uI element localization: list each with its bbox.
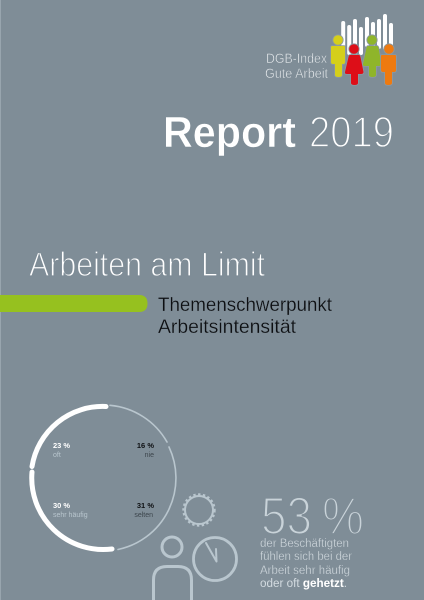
ring label: 31 % selten: selten bbox=[134, 512, 153, 519]
ring segment: sehr häufig 30 % bbox=[32, 472, 112, 550]
ring label: 30 % sehr häufig bbox=[53, 501, 88, 519]
logo text: Gute Arbeit bbox=[265, 66, 328, 81]
statistic description bbox=[260, 538, 352, 590]
logo yellow figure bbox=[331, 35, 345, 77]
logo red figure bbox=[345, 44, 364, 85]
logo text bbox=[265, 51, 328, 81]
ring label: 23 % oft: 23 % bbox=[53, 441, 70, 450]
logo text: DGB-Index bbox=[266, 51, 327, 66]
statistic: 53 % bbox=[261, 487, 364, 546]
ring segment: oft 23 % bbox=[32, 406, 106, 466]
ring segment: selten 31 % bbox=[118, 447, 176, 550]
icon: gear bbox=[184, 494, 214, 526]
ring label: 23 % oft: oft bbox=[53, 452, 61, 459]
statistic description: der Beschäftigten bbox=[260, 538, 349, 550]
statistic description: fühlen sich bei der bbox=[260, 551, 352, 563]
heading: Arbeiten am Limit: Arbeiten am Limit bbox=[29, 246, 265, 284]
icon: clock bbox=[194, 538, 236, 580]
subheading: Themenschwerpunkt Arbeitsintensität bbox=[158, 294, 333, 338]
logo: DGB-Index Gute Arbeit bbox=[265, 14, 396, 85]
logo green figure bbox=[363, 35, 382, 77]
ring label: 16 % nie bbox=[137, 441, 154, 459]
statistic description: oder oft gehetzt. bbox=[260, 578, 347, 590]
logo white bars bbox=[341, 14, 393, 55]
ring label: 30 % sehr häufig: 30 % bbox=[53, 501, 70, 510]
title: Report 2019: 2019 bbox=[309, 108, 394, 157]
title: Report 2019 bbox=[163, 108, 394, 157]
ring label: 30 % sehr häufig: sehr häufig bbox=[53, 512, 88, 519]
ring label: 31 % selten bbox=[134, 501, 154, 519]
ring label: 16 % nie: nie bbox=[145, 452, 154, 459]
title: Report 2019: Report bbox=[163, 108, 296, 157]
subheading: Themenschwerpunkt Arbeitsintensität: Arbeitsintensität bbox=[158, 316, 297, 338]
ring label: 16 % nie: 16 % bbox=[137, 441, 154, 450]
icon: person bbox=[154, 537, 192, 600]
statistic description: Arbeit sehr häufig bbox=[260, 565, 350, 577]
ring chart: frequency of feeling rushed bbox=[32, 405, 176, 550]
ring label: 23 % oft bbox=[53, 441, 70, 459]
green accent bar bbox=[0, 295, 148, 312]
ring label: 31 % selten: 31 % bbox=[137, 501, 154, 510]
logo orange figure bbox=[381, 44, 396, 85]
statistic: 53 %: 53 bbox=[261, 487, 312, 546]
ring segment: nie 16 % bbox=[110, 405, 167, 442]
subheading: Themenschwerpunkt Arbeitsintensität: Themenschwerpunkt bbox=[158, 294, 333, 316]
statistic: 53 %: % bbox=[322, 487, 364, 546]
